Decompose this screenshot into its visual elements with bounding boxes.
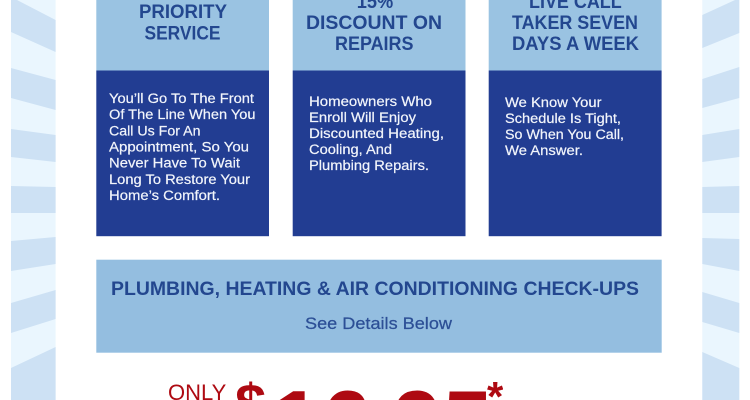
heading: 15% discount on repairs: REPAIRS — [335, 34, 414, 55]
heading: priority service: PRIORITY — [139, 2, 227, 23]
banner heading: PLUMBING, HEATING & AIR CONDITIONING CHECK-UPS — [111, 279, 639, 300]
text: live call description: So When You Call, — [505, 127, 624, 142]
panel: priority service — [96, 0, 269, 236]
priority service body background — [96, 70, 269, 236]
live call body background — [489, 70, 662, 236]
heading: 15% discount on repairs — [306, 0, 442, 55]
panel: check-ups banner — [96, 260, 662, 353]
heading: priority service: SERVICE — [144, 24, 220, 44]
text: discount description: Cooling, And — [309, 142, 392, 157]
text: priority service description: Call Us For An — [109, 124, 200, 138]
heading: live call taker seven days a week — [512, 0, 639, 55]
heading: 15% discount on repairs: DISCOUNT ON — [306, 13, 442, 34]
text: discount description: Enroll Will Enjoy — [309, 110, 416, 125]
text: priority service description: Of The Line When You — [109, 107, 256, 122]
text: priority service description: Appointment, So You — [109, 140, 249, 154]
heading: priority service — [139, 2, 227, 44]
panel: discount on repairs — [293, 0, 466, 236]
text: live call description: We Know Your — [505, 95, 602, 110]
banner subheading: See Details Below — [305, 314, 453, 333]
discount body background — [293, 70, 466, 236]
right sunburst strip — [702, 0, 739, 400]
price callout — [168, 375, 503, 400]
text: priority service description: Home’s Comfort. — [109, 188, 220, 203]
heading: live call taker seven days a week: DAYS A WEEK — [512, 34, 639, 55]
text: priority service description — [109, 91, 256, 203]
heading: live call taker seven days a week: TAKER SEVEN — [512, 13, 638, 34]
text: discount description — [309, 94, 444, 173]
text: priority service description: You’ll Go To The Front — [109, 91, 254, 106]
text: live call description: Schedule Is Tight, — [505, 111, 621, 126]
text: priority service description: Never Have To Wait — [109, 156, 240, 170]
text: priority service description: Long To Restore Your — [109, 172, 251, 187]
left sunburst strip — [11, 0, 56, 400]
text: discount description: Homeowners Who — [309, 94, 432, 109]
text: discount description: Discounted Heating, — [309, 126, 444, 141]
panel: live call taker — [489, 0, 662, 236]
live call header background — [489, 0, 662, 70]
priority service header background — [96, 0, 269, 70]
text: live call description: We Answer. — [505, 143, 583, 158]
text: live call description — [505, 95, 624, 158]
discount header background — [293, 0, 466, 70]
banner background — [96, 260, 662, 353]
text: discount description: Plumbing Repairs. — [309, 158, 429, 173]
